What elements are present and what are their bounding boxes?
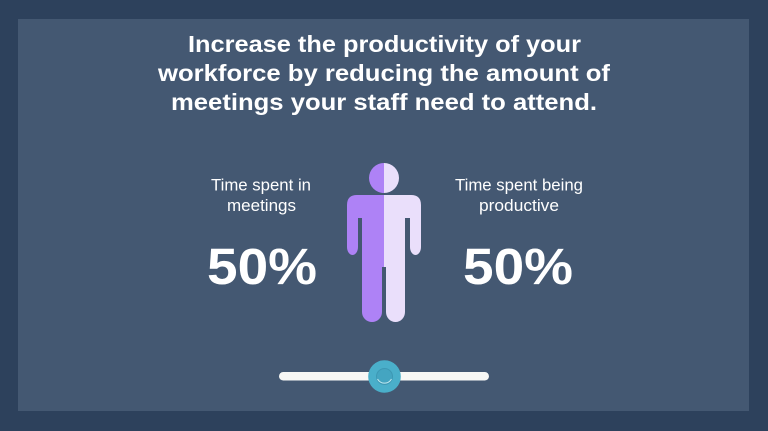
label: time spent in meetings: Time spent in bbox=[211, 176, 311, 194]
label: time spent being productive: productive bbox=[479, 196, 559, 215]
person right half bbox=[384, 163, 421, 322]
label: time spent being productive bbox=[455, 176, 583, 215]
stat: productive percentage: 50% bbox=[463, 238, 573, 295]
icon: half-filled person bbox=[347, 163, 421, 322]
slider bbox=[279, 360, 489, 393]
slider knob bbox=[368, 360, 401, 393]
stat: meetings percentage: 50% bbox=[207, 238, 317, 295]
title: workforce by reducing the amount of bbox=[157, 60, 610, 86]
title: meetings your staff need to attend. bbox=[171, 89, 597, 115]
title: Increase the productivity of your bbox=[188, 31, 581, 57]
title bbox=[157, 31, 610, 115]
person left half bbox=[347, 163, 384, 322]
slider track bbox=[279, 372, 489, 380]
label: time spent in meetings: meetings bbox=[227, 196, 296, 215]
label: time spent being productive: Time spent being bbox=[455, 176, 583, 194]
label: time spent in meetings bbox=[211, 176, 311, 215]
